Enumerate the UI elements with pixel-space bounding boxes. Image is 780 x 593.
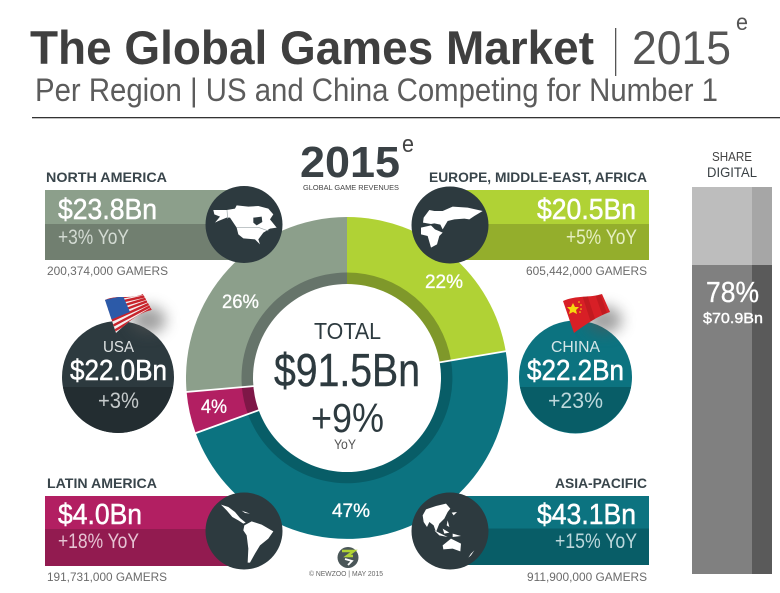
segment: North America 26% [186, 217, 347, 392]
logo: Newzoo [309, 547, 383, 578]
heading: 2015 global game revenues: e [402, 131, 414, 158]
donut chart [186, 217, 508, 539]
circle badge: USA [103, 339, 134, 356]
gamers: 191,731,000 GAMERS [47, 570, 167, 584]
revenue bar: +5% YoY [566, 226, 637, 249]
circle badge: +23% [548, 388, 603, 413]
revenue bar [45, 190, 245, 260]
icon: North America map [206, 186, 282, 263]
label: 22%: 22% [425, 272, 463, 293]
label: 4%: 4% [201, 397, 227, 418]
inner ring [241, 272, 452, 483]
heading: LATIN AMERICA [47, 475, 157, 491]
heading: 2015 global game revenues: GLOBAL GAME REVENUES [303, 185, 399, 192]
panel: North America [45, 169, 282, 278]
panel: USA [62, 290, 174, 433]
icon: China flag [558, 290, 622, 336]
circle badge: CHINA [551, 339, 600, 356]
segment: Europe, Middle-East, Africa 22% [347, 217, 506, 378]
stacked bar: 78% [706, 277, 759, 309]
title: The Global Games Market [30, 21, 594, 74]
subtitle: Per Region | US and China Competing for Number 1 [35, 72, 718, 108]
icon: Latin America map [206, 492, 282, 570]
gamers: 200,374,000 GAMERS [47, 264, 168, 278]
circle badge: $22.2Bn [527, 355, 624, 387]
total text: +9% [311, 395, 384, 441]
stacked bar [692, 187, 772, 574]
logo: Newzoo: © NEWZOO | MAY 2015 [309, 570, 383, 578]
icon: USA flag [100, 290, 166, 336]
gamers: 605,442,000 GAMERS [526, 264, 647, 278]
revenue bar [450, 190, 649, 260]
segment: Asia-Pacific 47% [196, 351, 508, 539]
stacked bar: $70.9Bn [703, 310, 763, 327]
circle badge: +3% [98, 388, 139, 413]
revenue bar [450, 496, 649, 565]
panel: Latin America [45, 475, 282, 584]
circle badge: $22.0Bn [70, 355, 167, 387]
panel: Asia-Pacific [412, 475, 649, 584]
heading: ASIA-PACIFIC [555, 475, 647, 491]
heading: SHARE [712, 149, 752, 164]
gamers: 911,900,000 GAMERS [527, 570, 647, 584]
revenue bar: +18% YoY [58, 530, 139, 553]
title: 2015 [632, 21, 731, 74]
heading: NORTH AMERICA [46, 169, 167, 185]
total text: YoY [334, 436, 357, 452]
title [30, 9, 748, 76]
panel: China [519, 290, 632, 434]
centre circle [253, 284, 441, 472]
revenue bar: $4.0Bn [58, 499, 142, 531]
panel: Europe, Middle-East, Africa [412, 169, 649, 278]
heading [707, 149, 757, 180]
revenue bar: +15% YoY [555, 530, 637, 553]
label: 47%: 47% [332, 501, 370, 522]
revenue bar: $20.5Bn [537, 194, 636, 226]
revenue bar: +3% YoY [58, 226, 129, 249]
panel: share digital [692, 149, 772, 574]
heading: DIGITAL [707, 164, 757, 180]
total text: $91.5Bn [274, 344, 420, 396]
circle badge [519, 320, 632, 434]
total text: TOTAL [314, 318, 381, 344]
revenue bar [45, 496, 245, 566]
circle badge [62, 321, 174, 433]
heading: 2015 global game revenues [300, 131, 414, 192]
heading: EUROPE, MIDDLE-EAST, AFRICA [429, 169, 647, 185]
icon: EMEA map [412, 186, 488, 264]
label: 26%: 26% [222, 292, 259, 313]
icon: Asia-Pacific map [412, 492, 488, 570]
revenue bar: $43.1Bn [537, 499, 636, 531]
title: e [736, 9, 748, 35]
heading: 2015 global game revenues: 2015 [300, 138, 400, 187]
segment: Latin America 4% [187, 378, 347, 433]
revenue bar: $23.8Bn [58, 194, 157, 226]
total text [274, 318, 420, 452]
